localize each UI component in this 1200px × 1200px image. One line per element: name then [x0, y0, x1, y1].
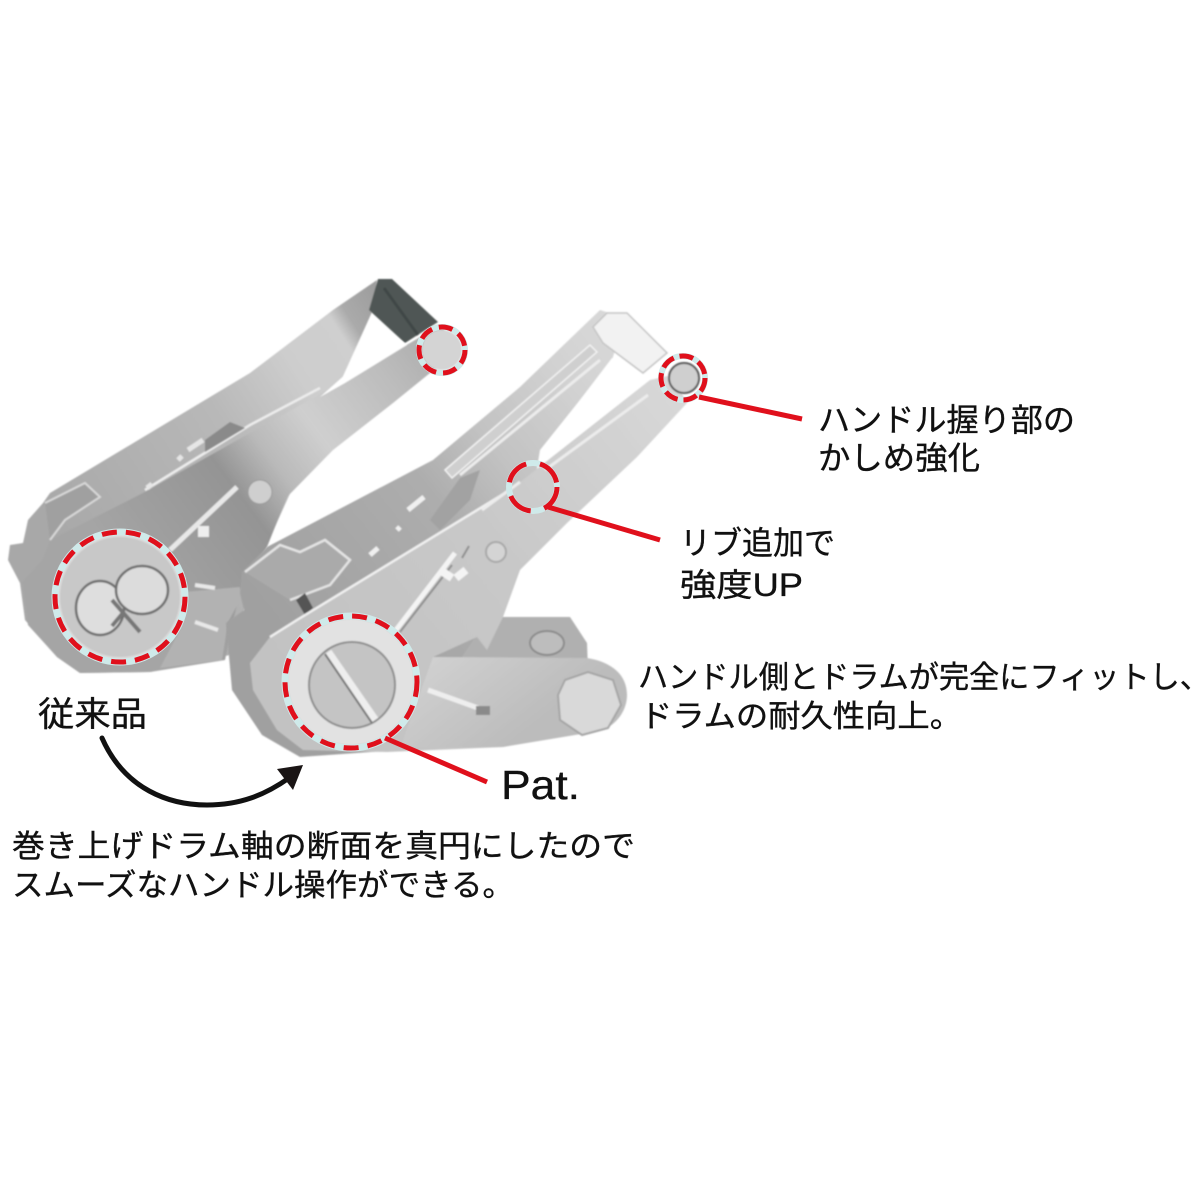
conventional: slot detail	[170, 487, 237, 550]
leader line: grip	[699, 397, 802, 419]
callout: rib strength	[680, 525, 835, 603]
label: patent: Pat.	[501, 762, 580, 808]
circle: right grip halo	[661, 356, 705, 400]
circle: right grip	[661, 356, 705, 400]
conventional: front plate	[22, 325, 462, 673]
conventional: end cap	[422, 330, 462, 370]
improved: slot outline	[400, 546, 469, 632]
improved: bolt	[558, 672, 621, 735]
improved: upper ribs	[460, 360, 648, 510]
conventional: ratchet wheel teeth	[45, 483, 100, 540]
conventional: drum split shaft left	[76, 581, 124, 635]
improved: pawl block shadow	[430, 470, 480, 530]
conventional: lower link	[160, 587, 240, 668]
improved: pawl slot	[445, 345, 597, 478]
conventional: slot tab	[198, 526, 209, 537]
conventional: grip ridge	[384, 288, 418, 335]
circle: left grip halo	[419, 327, 465, 373]
callout: drum fit: ドラムの耐久性向上。	[640, 699, 962, 734]
improved: slot tabs	[440, 570, 466, 578]
improved: wheel shaft shadow	[296, 593, 313, 615]
improved: drum shaft	[309, 642, 395, 728]
highlight circles	[55, 327, 705, 748]
conventional: pawl shadow	[205, 422, 245, 452]
label: conventional product: 従来品	[38, 696, 147, 734]
leader line: rib	[548, 507, 660, 540]
callout: rib strength: リブ追加で	[680, 525, 835, 561]
improved: end cap	[669, 363, 699, 393]
improved: front plate	[250, 375, 687, 752]
description: round drum shaft: 巻き上げドラム軸の断面を真円にしたので	[12, 829, 635, 864]
improved: drum pin outline	[325, 654, 372, 723]
arrow: conventional to improved	[102, 738, 303, 805]
improved: lower link	[400, 657, 627, 748]
circle: left grip	[419, 327, 465, 373]
conventional: drum split shaft right	[116, 566, 168, 614]
improved: lower slot detail	[428, 690, 478, 708]
conventional: rear handle band	[8, 280, 377, 673]
circle: rib halo	[509, 463, 557, 511]
callout: grip caulking	[818, 402, 1075, 476]
improved: drum cross pin	[328, 652, 375, 720]
improved: drum ring	[288, 619, 414, 745]
ratchet: improved product	[226, 310, 699, 757]
conventional: gap between bands	[320, 331, 407, 397]
conventional: pawl detail	[147, 440, 203, 488]
improved: rear link bolt	[530, 631, 564, 655]
description: round drum shaft	[12, 829, 635, 903]
callout: drum fit	[638, 660, 1200, 734]
improved: window in handle	[541, 358, 641, 452]
description: round drum shaft: スムーズなハンドル操作ができる。	[12, 868, 514, 903]
conventional: highlight rib	[145, 388, 320, 490]
leader line: patent	[385, 738, 487, 782]
callout: rib strength: 強度UP	[680, 567, 803, 603]
circle: right drum	[285, 616, 417, 748]
callout: grip caulking: ハンドル握り部の	[818, 402, 1075, 438]
circle: rib	[509, 463, 557, 511]
conventional: drum ring	[58, 535, 182, 659]
improved: lower slot tab	[476, 706, 490, 715]
improved: rear link	[440, 617, 588, 690]
conventional: dark grip	[369, 279, 438, 343]
circle: left drum halo	[55, 532, 185, 662]
improved: release slot	[396, 553, 455, 630]
improved: ratchet wheel teeth	[245, 540, 350, 600]
conventional: link highlights	[195, 585, 218, 630]
improved: rear handle plate	[226, 310, 625, 757]
conventional: rivet	[248, 480, 272, 504]
ratchet: conventional product	[8, 279, 462, 673]
circle: right drum halo	[285, 616, 417, 748]
improved: white grip	[593, 313, 667, 373]
improved: pawl detail	[370, 497, 424, 555]
improved: lip highlight	[270, 490, 510, 637]
callout: grip caulking: かしめ強化	[818, 440, 980, 476]
conventional: drum cross pin	[112, 600, 140, 632]
improved: rivet	[486, 542, 506, 562]
circle: left drum	[55, 532, 185, 662]
